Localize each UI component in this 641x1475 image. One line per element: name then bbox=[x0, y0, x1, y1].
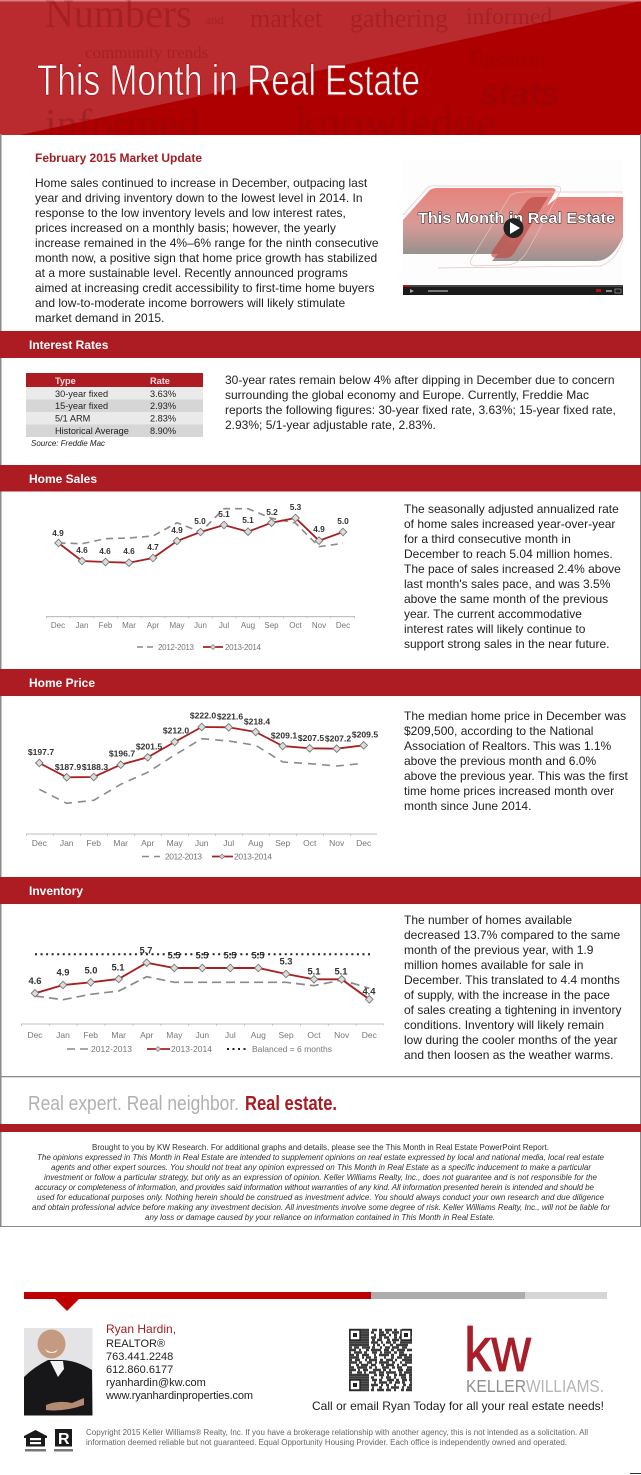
section bar: Home Price: Home Price bbox=[29, 676, 95, 690]
header banner: knowledge bbox=[295, 97, 497, 148]
agent details: Ryan Hardin, bbox=[106, 1322, 176, 1336]
chart: home price: $207.2 bbox=[325, 734, 351, 744]
chart: home price: Dec bbox=[32, 838, 48, 848]
home price text: The median home price in December was bbox=[404, 709, 626, 723]
chart: home sales: 4.9 bbox=[171, 525, 183, 535]
chart: home sales: Sep bbox=[264, 621, 279, 630]
legend: home price: 2012-2013 bbox=[165, 852, 202, 862]
chart: inventory: Aug bbox=[251, 1030, 266, 1040]
rates table: 3.63% bbox=[150, 389, 176, 399]
agent details: www.ryanhardinproperties.com bbox=[105, 1390, 253, 1402]
chart: home price: $188.3 bbox=[82, 762, 108, 772]
agent details bbox=[105, 1322, 253, 1402]
agent details: 612.860.6177 bbox=[106, 1364, 173, 1376]
home price text: above the previous month and 6.0% bbox=[404, 754, 596, 768]
intro text: aimed at increasing credit accessibility to first-time home buyers bbox=[35, 281, 374, 295]
chart: inventory: 5.3 bbox=[279, 956, 293, 966]
chart: home sales: Aug bbox=[241, 621, 255, 630]
interest rates text: surrounding the global economy and Europe. Currently, Freddie Mac bbox=[225, 388, 589, 402]
play button bbox=[504, 218, 524, 238]
chart: inventory: 5.1 bbox=[111, 962, 125, 972]
legend: inventory: 2012-2013 bbox=[91, 1044, 132, 1054]
home sales text: of home sales increased year-over-year bbox=[404, 517, 615, 531]
chart: inventory: Sep bbox=[278, 1030, 294, 1040]
legend: inventory bbox=[67, 1044, 332, 1054]
intro text: market demand in 2015. bbox=[35, 311, 164, 325]
inventory text: million homes available for sale in bbox=[404, 958, 583, 972]
video thumbnail bbox=[403, 160, 623, 295]
interest rates text: reports the following figures: 30-year fixed rate, 3.63%; 15-year fixed rate, bbox=[225, 403, 616, 417]
chart: inventory: Jun bbox=[195, 1030, 209, 1040]
chart: inventory: Dec bbox=[27, 1030, 43, 1040]
header banner: market bbox=[250, 4, 323, 33]
chart: home sales: 5.0 bbox=[337, 516, 349, 526]
home price text: $209,500, according to the National bbox=[404, 724, 593, 738]
agent photo bbox=[24, 1328, 92, 1416]
home sales text: The pace of sales increased 2.4% above bbox=[404, 562, 621, 576]
inventory text: month of the previous year, with 1.9 bbox=[404, 943, 594, 957]
home price text: Association of Realtors. This was 1.1% bbox=[404, 739, 612, 753]
chart: home sales: 5.3 bbox=[290, 502, 302, 512]
intro text: month now, a positive sign that home price growth has stabilized bbox=[35, 251, 377, 265]
chart: home price: $218.4 bbox=[244, 716, 270, 726]
footer colour bar bbox=[24, 1292, 607, 1311]
disclaimer: used for educational purposes only. Nothing herein should be construed as investment advice. You should always conduct your own research and due diligence bbox=[37, 1193, 605, 1202]
chart: home sales: 5.0 bbox=[194, 516, 206, 526]
QR code bbox=[349, 1330, 412, 1390]
chart: home sales: 4.7 bbox=[147, 542, 159, 552]
chart: inventory: 5.5 bbox=[251, 950, 265, 960]
title: This Month in Real Estate bbox=[37, 56, 420, 105]
chart: home price: Apr bbox=[141, 838, 154, 848]
chart: home sales: 5.2 bbox=[266, 507, 278, 517]
rates table: 2.93% bbox=[150, 401, 176, 411]
page side borders bbox=[0, 134, 641, 1227]
equal housing icon bbox=[24, 1430, 47, 1452]
disclaimer: Brought to you by KW Research. For additional graphs and details, please see the This Month in Real Estate PowerPoint Report. bbox=[92, 1143, 549, 1152]
chart: inventory: Feb bbox=[83, 1030, 98, 1040]
header banner: and bbox=[205, 12, 224, 27]
chart: home price: May bbox=[167, 838, 183, 848]
chart: home sales: Jul bbox=[219, 621, 229, 630]
rates table: Type bbox=[55, 376, 76, 386]
home price text: month since June 2014. bbox=[404, 799, 531, 813]
rates table: 5/1 ARM bbox=[55, 414, 90, 424]
chart: home sales: May bbox=[169, 621, 185, 630]
intro heading: February 2015 Market Update bbox=[35, 151, 202, 165]
chart: inventory: 5.1 bbox=[334, 966, 348, 976]
chart: inventory: 4.6 bbox=[28, 975, 42, 986]
section bar: Home Price bbox=[0, 669, 641, 696]
legend: home sales: 2013-2014 bbox=[225, 643, 262, 652]
home sales text: The seasonally adjusted annualized rate bbox=[404, 502, 619, 516]
inventory text: decreased 13.7% compared to the same bbox=[404, 928, 620, 942]
chart: inventory: 4.9 bbox=[56, 966, 70, 978]
table source: Source: Freddie Mac bbox=[31, 439, 105, 448]
disclaimer: accuracy or completeness of information, and provides said information without warranties of any kind. All information presented herein is intended and should be bbox=[35, 1183, 595, 1192]
chart: inventory: Jan bbox=[56, 1030, 70, 1040]
chart: home sales: 4.6 bbox=[76, 545, 88, 555]
intro text: Home sales continued to increase in December, outpacing last bbox=[35, 176, 368, 190]
intro text: year and driving inventory down to the lowest level in 2014. In bbox=[35, 191, 363, 205]
chart: inventory: Apr bbox=[140, 1030, 153, 1040]
chart: inventory: 5.5 bbox=[195, 950, 209, 960]
intro text: response to the low inventory levels and low interest rates, bbox=[35, 206, 346, 220]
chart: inventory: 5.5 bbox=[167, 950, 181, 960]
intro text: at a more sustainable level. Recently announced programs bbox=[35, 266, 348, 280]
chart: home sales: Dec bbox=[51, 621, 65, 630]
slogan band: Real expert. Real neighbor. bbox=[28, 1093, 239, 1115]
disclaimer: The opinions expressed in This Month in Real Estate are intended to supplement opinions on real estate expressed by local and national media, local real estate bbox=[37, 1153, 605, 1162]
chart: home price: Aug bbox=[248, 838, 264, 848]
chart: home sales: Feb bbox=[99, 621, 113, 630]
chart: home price: Feb bbox=[86, 838, 101, 848]
inventory text: conditions. Inventory will likely remain bbox=[404, 1018, 604, 1032]
header banner: informed bbox=[466, 4, 552, 30]
chart: home sales: 4.9 bbox=[52, 528, 64, 538]
chart: home sales: 4.6 bbox=[99, 546, 111, 556]
legend: home price: 2013-2014 bbox=[234, 852, 272, 862]
home sales text: support strong sales in the near future. bbox=[404, 637, 609, 651]
chart: home sales: Jun bbox=[194, 621, 207, 630]
chart: home sales: Jan bbox=[76, 621, 88, 630]
chart: home price: $187.9 bbox=[55, 762, 81, 772]
intro text: increase remained in the 4%–6% range for the ninth consecutive bbox=[35, 236, 379, 250]
chart: home price: $212.0 bbox=[163, 726, 189, 736]
disclaimer: any loss or damage caused by your reliance on information contained in This Month in Real Estate. bbox=[145, 1213, 495, 1222]
copyright bbox=[86, 1428, 588, 1447]
header banner: stats bbox=[480, 75, 559, 113]
rates table: 30-year fixed bbox=[55, 389, 108, 399]
section bar: Home Sales: Home Sales bbox=[29, 472, 97, 486]
chart: home sales: 4.9 bbox=[313, 524, 325, 534]
chart: inventory: Mar bbox=[111, 1030, 126, 1040]
chart: home price: $222.0 bbox=[190, 710, 216, 720]
inventory text: and then loosen as the weather warms. bbox=[404, 1048, 613, 1062]
rates table: 2.83% bbox=[150, 414, 176, 424]
call to action: Call or email Ryan Today for all your real estate needs! bbox=[312, 1399, 604, 1413]
chart: home sales: 5.1 bbox=[218, 509, 230, 519]
chart: home price: $197.7 bbox=[28, 747, 54, 757]
home sales text: interest rates will likely continue to bbox=[404, 622, 586, 636]
home price text: above the previous year. This was the first bbox=[404, 769, 629, 783]
header banner: gathering bbox=[350, 4, 448, 33]
chart: inventory: Nov bbox=[334, 1030, 350, 1040]
chart: home price: Dec bbox=[356, 838, 372, 848]
chart: home price: Jul bbox=[223, 838, 234, 848]
chart: home sales: Apr bbox=[147, 621, 160, 630]
player bar bbox=[403, 285, 623, 295]
chart: home price: Oct bbox=[303, 838, 317, 848]
rates table: 8.90% bbox=[150, 426, 176, 436]
realtor icon: R bbox=[58, 1431, 70, 1448]
chart: inventory: 5.0 bbox=[84, 964, 98, 976]
realtor icon bbox=[54, 1429, 73, 1452]
chart: home sales: 5.1 bbox=[242, 515, 254, 525]
legend: home sales bbox=[137, 643, 262, 652]
chart: inventory: Oct bbox=[307, 1030, 321, 1040]
copyright: Copyright 2015 Keller Williams® Realty, Inc. If you have a brokerage relationship with another agency, this is not intended as a solicitation. All bbox=[86, 1428, 588, 1437]
section bar: Inventory: Inventory bbox=[29, 884, 83, 898]
chart: home price: $209.1 bbox=[271, 730, 297, 740]
disclaimer: and obtain professional advice before making any investment decision. All investments involve some degree of risk. Keller Williams Realty, Inc., will not be liable for bbox=[32, 1203, 610, 1212]
rates table bbox=[26, 373, 203, 437]
video title: This Month in Real Estate bbox=[418, 210, 615, 227]
chart: home price: $201.5 bbox=[136, 742, 162, 752]
legend: home sales: 2012-2013 bbox=[158, 643, 195, 652]
chart: home sales bbox=[46, 502, 355, 652]
disclaimer: agents and other expert sources. You should not treat any opinion expressed on This Month in Real Estate as a specific inducement to make a particular bbox=[51, 1163, 591, 1172]
inventory text: low during the cooler months of the year bbox=[404, 1033, 617, 1047]
home sales text: for a third consecutive month in bbox=[404, 532, 571, 546]
rates table: Rate bbox=[150, 376, 170, 386]
chart: home price bbox=[26, 710, 378, 862]
chart: inventory: 4.4 bbox=[362, 986, 376, 996]
legend: inventory: 2013-2014 bbox=[171, 1044, 212, 1054]
home sales text: December to reach 5.04 million homes. bbox=[404, 547, 613, 561]
rates table: 15-year fixed bbox=[55, 401, 108, 411]
slogan band: Real estate. bbox=[245, 1093, 337, 1115]
agent details: ryanhardin@kw.com bbox=[106, 1377, 206, 1389]
chart: home price: $207.5 bbox=[298, 733, 324, 743]
chart: home price: $196.7 bbox=[109, 748, 135, 758]
slogan band bbox=[0, 1076, 641, 1132]
header banner: Passion bbox=[470, 46, 547, 73]
section bar: Home Sales bbox=[0, 465, 641, 492]
chart: home price: $221.6 bbox=[217, 712, 243, 722]
section bar: Interest Rates bbox=[0, 331, 641, 358]
copyright: information deemed reliable but not guaranteed. Equal Opportunity Housing Provider. Each office is independently owned and operated. bbox=[86, 1438, 567, 1447]
intro text: and low-to-moderate income borrowers will likely stimulate bbox=[35, 296, 345, 310]
agent details: REALTOR® bbox=[106, 1338, 165, 1350]
header banner: informed bbox=[45, 102, 199, 148]
section bar: Inventory bbox=[0, 877, 641, 904]
chart: home price: $209.5 bbox=[352, 730, 378, 740]
chart: home price: Mar bbox=[113, 838, 128, 848]
chart: inventory: 5.1 bbox=[307, 966, 321, 976]
chart: inventory: May bbox=[166, 1030, 183, 1040]
chart: home price: Nov bbox=[329, 838, 345, 848]
disclaimer box bottom edge bbox=[0, 1226, 641, 1227]
home price text: time home prices increased month over bbox=[404, 784, 614, 798]
chart: inventory: 5.5 bbox=[223, 950, 237, 960]
intro text: prices increased on a monthly basis; however, the yearly bbox=[35, 221, 336, 235]
interest rates text: 2.93%; 5/1-year adjustable rate, 2.83%. bbox=[225, 418, 436, 432]
home sales text: above the same month of the previous bbox=[404, 592, 608, 606]
section bar: Interest Rates: Interest Rates bbox=[29, 338, 109, 352]
inventory text: The number of homes available bbox=[404, 913, 572, 927]
Keller Williams logo: kw bbox=[464, 1316, 531, 1385]
chart: home sales: Nov bbox=[312, 621, 326, 630]
chart: home sales: Mar bbox=[122, 621, 136, 630]
Keller Williams logo: WILLIAMS. bbox=[526, 1376, 604, 1396]
legend: home price bbox=[142, 852, 272, 862]
home sales text: year. The current accommodative bbox=[404, 607, 582, 621]
header banner bbox=[0, 0, 641, 148]
chart: home sales: Oct bbox=[289, 621, 302, 630]
legend: inventory: Balanced = 6 months bbox=[252, 1044, 332, 1054]
Keller Williams logo: KELLER bbox=[466, 1376, 526, 1396]
chart: inventory: Jul bbox=[225, 1030, 236, 1040]
header banner: community trends bbox=[85, 43, 208, 62]
interest rates text: 30-year rates remain below 4% after dipping in December due to concern bbox=[225, 373, 615, 387]
chart: inventory bbox=[21, 944, 384, 1054]
disclaimer: investment or follow a particular strategy, but only as an expression of opinion. Keller Williams Realty, Inc., does not guarantee and is not responsible for the bbox=[44, 1173, 598, 1182]
inventory text: of supply, with the increase in the pace bbox=[404, 988, 610, 1002]
home sales text: last month's sales pace, and was 3.5% bbox=[404, 577, 611, 591]
chart: home sales: 4.6 bbox=[123, 546, 135, 556]
chart: home price: Jun bbox=[195, 838, 209, 848]
chart: inventory: Dec bbox=[362, 1030, 378, 1040]
chart: home price: Sep bbox=[275, 838, 291, 848]
inventory text: of sales creating a tightening in inventory bbox=[404, 1003, 621, 1017]
Keller Williams logo bbox=[464, 1316, 604, 1396]
chart: home sales: Dec bbox=[336, 621, 350, 630]
rates table: Historical Average bbox=[55, 426, 129, 436]
agent details: 763.441.2248 bbox=[106, 1351, 173, 1363]
disclaimer bbox=[32, 1143, 610, 1222]
inventory text: December. This translated to 4.4 months bbox=[404, 973, 620, 987]
chart: inventory: 5.7 bbox=[139, 944, 153, 956]
chart: home price: Jan bbox=[60, 838, 74, 848]
